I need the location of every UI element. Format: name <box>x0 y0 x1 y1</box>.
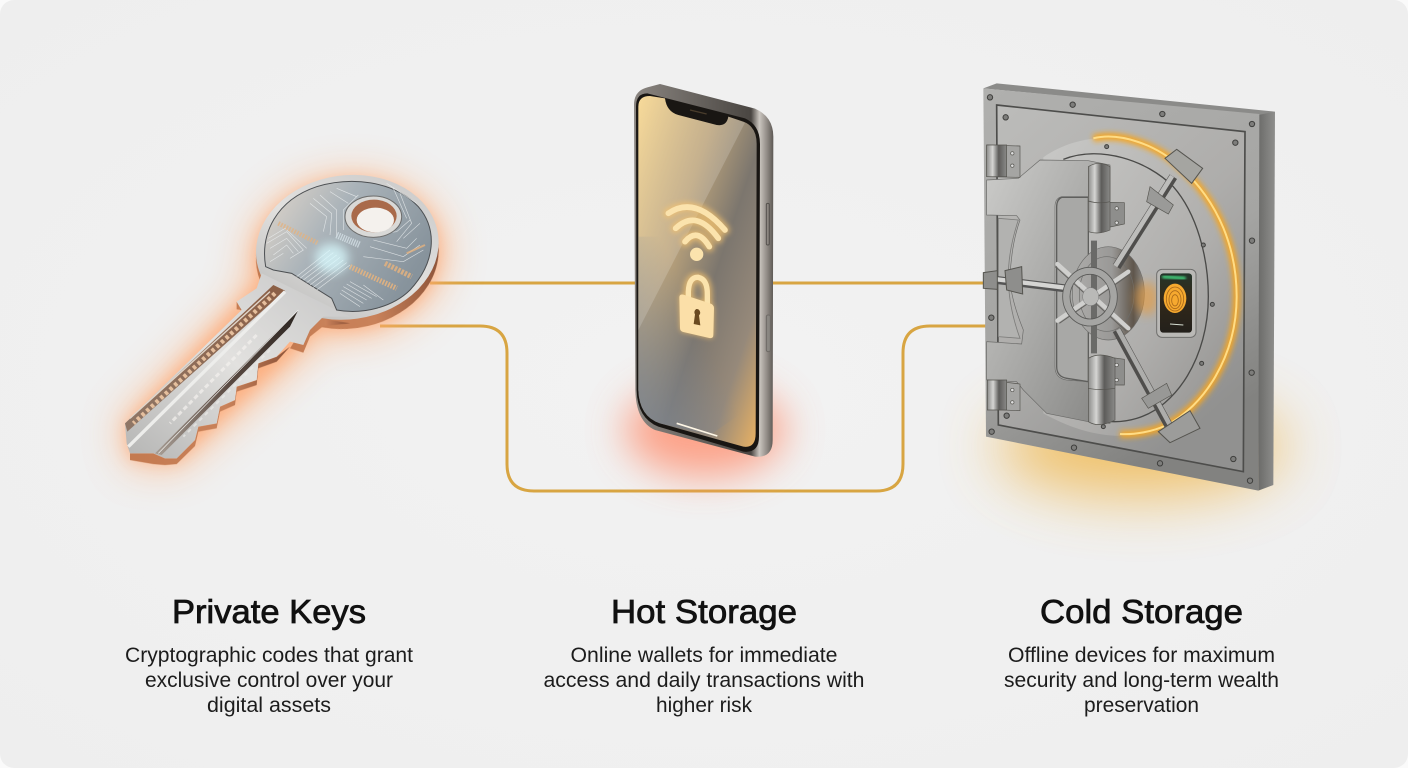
icon: smartphone <box>625 84 785 477</box>
icon: wifi signal <box>668 207 725 261</box>
fingerprint scanner <box>1157 269 1196 337</box>
left latch <box>983 267 1023 294</box>
key blade channels <box>125 285 298 455</box>
heading: cold storage: Cold Storage <box>1040 593 1243 630</box>
vault top edge <box>983 83 1275 115</box>
vault front <box>983 88 1259 491</box>
icon: padlock <box>679 277 714 338</box>
connector: hot storage to cold storage <box>770 282 988 284</box>
description: cold storage: security and long-term wealth <box>1004 669 1279 692</box>
hinge: upper left <box>987 145 1020 177</box>
description: cold storage: preservation <box>1084 694 1199 717</box>
key near glow <box>126 168 450 462</box>
bar: bottom right <box>1117 329 1170 425</box>
column: cold storage <box>1004 593 1279 717</box>
phone speaker <box>690 110 707 114</box>
hinge: lower left <box>987 380 1020 411</box>
vault door disc <box>1043 138 1237 436</box>
hinge: lower centre <box>1088 355 1124 425</box>
description: hot storage <box>544 644 864 717</box>
vault glow <box>997 397 1283 497</box>
icon: fingerprint <box>1164 284 1186 313</box>
phone bezel <box>636 93 760 452</box>
vault hinges <box>987 145 1124 425</box>
description: private keys: Cryptographic codes that grant <box>125 644 413 667</box>
heading: hot storage: Hot Storage <box>611 593 797 630</box>
icon: vault door <box>983 83 1283 497</box>
phone body <box>634 84 773 457</box>
key edge <box>130 169 448 465</box>
vault wheel <box>1055 264 1130 331</box>
vault hinge plate <box>987 160 1110 423</box>
phone side buttons <box>766 203 770 352</box>
phone glow <box>625 383 785 477</box>
heading: private keys: Private Keys <box>172 593 366 630</box>
connector: keys to cold storage <box>380 326 988 491</box>
hub amber glow <box>1135 282 1158 315</box>
key hole <box>345 196 402 237</box>
description: hot storage: higher risk <box>656 694 752 717</box>
lock clamp: upper <box>1147 187 1173 214</box>
column: private keys <box>125 593 413 717</box>
vault latch recess <box>998 218 1020 338</box>
lock bracket: top <box>1165 149 1203 183</box>
vault side <box>1258 112 1275 491</box>
column: hot storage <box>544 593 864 717</box>
vault window <box>1057 197 1088 382</box>
vault inner ring <box>1063 154 1208 422</box>
lock bracket: bottom <box>1158 411 1200 443</box>
key wide glow <box>120 164 456 468</box>
vault glow ring <box>1093 137 1237 434</box>
bar: top right <box>1115 176 1173 267</box>
description: private keys: exclusive control over your <box>145 669 393 692</box>
vault disc rivets <box>1101 145 1214 429</box>
vault lock bars <box>997 176 1173 425</box>
bar: vertical spindle <box>1085 241 1103 353</box>
key gold chips <box>278 223 425 288</box>
hinge: upper centre <box>1088 163 1124 233</box>
connector: keys to hot storage <box>430 282 640 284</box>
key circuit traces <box>267 183 423 307</box>
key circuit panel <box>265 181 431 311</box>
description: private keys <box>125 644 413 717</box>
phone home bar <box>677 423 717 436</box>
vault rivets <box>987 95 1255 483</box>
connector lines <box>380 283 988 491</box>
icon: private key <box>120 163 456 468</box>
description: cold storage: Offline devices for maximum <box>1008 644 1275 667</box>
description: cold storage <box>1004 644 1279 717</box>
key top face <box>125 163 448 458</box>
vault inner panel <box>997 105 1245 472</box>
description: hot storage: access and daily transactions with <box>544 669 864 692</box>
vault hub <box>1072 247 1144 340</box>
description: private keys: digital assets <box>207 694 331 717</box>
description: hot storage: Online wallets for immediate <box>570 644 838 667</box>
bar: left <box>997 279 1065 288</box>
phone screen <box>638 96 757 447</box>
key centre glow <box>315 243 348 273</box>
lock clamp: lower <box>1142 383 1172 408</box>
